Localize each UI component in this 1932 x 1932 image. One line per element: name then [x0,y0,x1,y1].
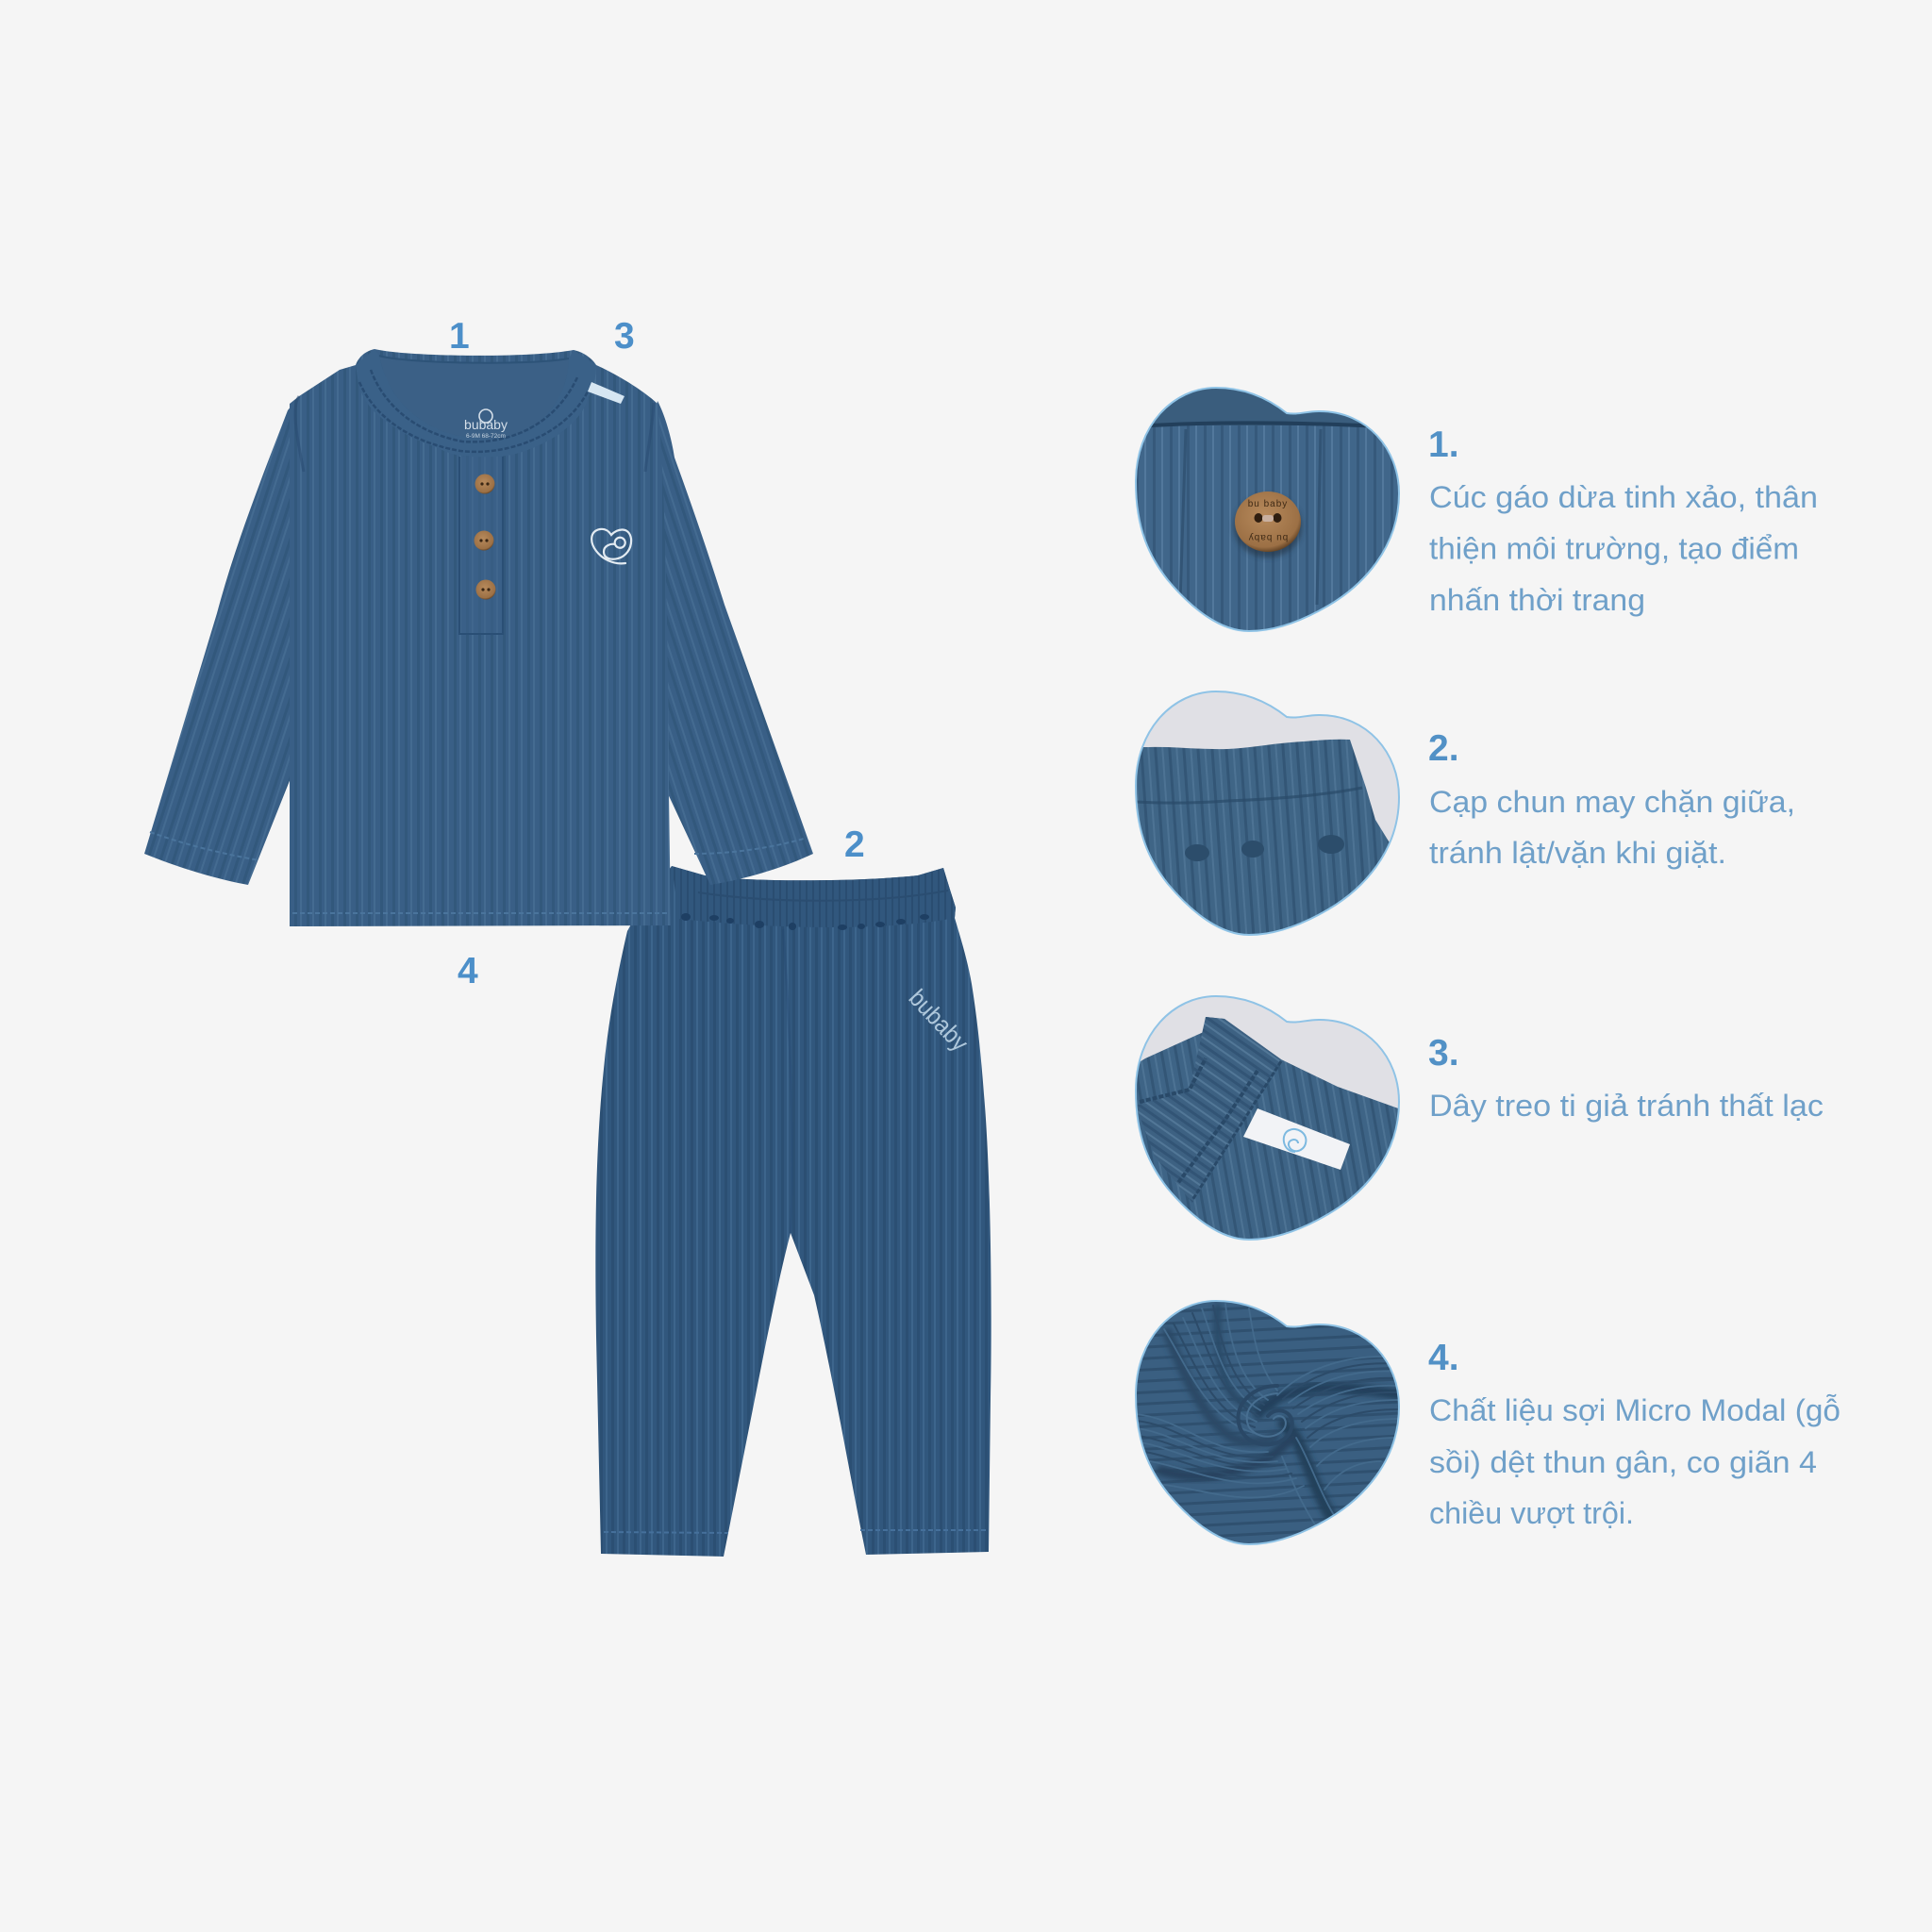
heart photo 2: waistband [1136,691,1399,935]
heart photo 3: pacifier loop [1136,996,1404,1240]
feature 2 text [1428,728,1795,870]
feature 1 text: Cúc gáo dừa tinh xảo, thân [1429,480,1818,514]
callout number 3: 3 [614,316,635,357]
placket [459,457,503,634]
feature 3 text [1428,1033,1824,1123]
left sleeve [144,396,311,885]
feature 4 text [1428,1338,1840,1530]
feature 3 text: 3. [1428,1033,1459,1074]
feature 3 text: Dây treo ti giả tránh thất lạc [1429,1089,1824,1123]
hem stitching [604,1530,987,1533]
callout number 2: 2 [844,824,865,865]
waistband gathers [681,913,929,930]
chest logo [591,529,631,563]
feature 1 text: thiện môi trường, tạo điểm [1429,532,1799,566]
feature 4 text: chiều vượt trội. [1429,1496,1634,1530]
collar band [356,349,596,457]
callout number 4: 4 [458,951,478,991]
waistband fold [698,891,948,901]
feature 4 text: 4. [1428,1338,1459,1378]
heart photo 1: coconut button [1136,388,1399,631]
right sleeve [641,401,813,885]
buttons [474,474,496,600]
neck label [464,409,508,440]
feature 2 text: Cạp chun may chặn giữa, [1429,785,1795,819]
neck label: bubaby [464,417,508,432]
feature 2 text: tránh lật/vặn khi giặt. [1429,836,1726,870]
hem stitching [150,832,804,913]
feature 4 text: Chất liệu sợi Micro Modal (gỗ [1429,1393,1840,1427]
pants logo: bubaby [904,984,974,1057]
feature 1 text: 1. [1428,425,1459,465]
neck opening [379,356,569,439]
heart photo 1: coconut button: bu baby [1248,532,1288,542]
sleeve seams [295,396,654,472]
waistband [672,866,956,927]
feature 1 text [1428,425,1818,617]
shoulder tag [588,382,625,404]
heart photo 1: coconut button: bu baby [1248,499,1288,509]
pants illustration [595,866,991,1557]
pants body [595,866,991,1557]
heart photo 4: fabric swirl [1136,1301,1404,1544]
pants seam [783,929,792,1233]
feature 2 text: 2. [1428,728,1459,769]
shirt body [290,349,671,926]
collar stitching [359,382,588,452]
callout number 1: 1 [449,316,470,357]
feature 4 text: sồi) dệt thun gân, co giãn 4 [1429,1445,1817,1479]
neck label: 6-9M 68-72cm [466,433,506,440]
shirt illustration [144,349,813,926]
feature 1 text: nhấn thời trang [1429,583,1645,617]
